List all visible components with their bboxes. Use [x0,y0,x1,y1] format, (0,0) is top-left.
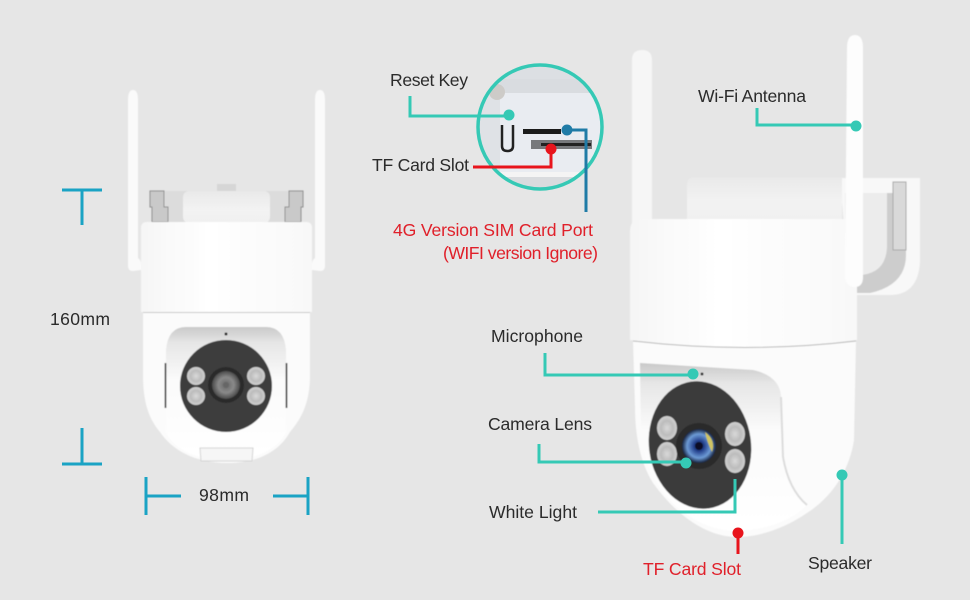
mounting bracket [150,184,303,223]
callout: SIM port: (WIFI version Ignore) [443,243,598,263]
lower body dome [633,341,856,537]
width dimension [146,477,308,515]
camera recess [166,327,286,460]
seam line [633,341,856,348]
lens panel [180,340,272,432]
LEDs [657,416,745,473]
side vents [166,363,286,408]
height dimension [62,190,102,464]
callout: microphone [491,326,698,380]
lower body dome [143,313,310,463]
callout: TF card slot bottom [643,528,744,579]
upper body [630,219,857,348]
callout: reset key [390,70,514,120]
front antenna [845,35,863,287]
callout: white light: White Light [489,502,577,522]
lens [208,367,244,403]
callout: TF card slot bottom: TF Card Slot [643,559,741,579]
microphone hole [700,372,704,376]
reset key U [502,125,513,151]
lens panel [641,375,759,515]
upper body [141,222,312,312]
back antenna [632,50,652,225]
callout: speaker: Speaker [808,553,872,573]
microphone hole [224,332,228,336]
TF slot [531,140,592,149]
callout: TF card slot inset: TF Card Slot [372,155,469,175]
callout: Wi-Fi antenna [698,86,862,132]
callout: white light [489,479,735,522]
callout: reset key: Reset Key [390,70,468,90]
SIM slot [523,129,561,134]
left antenna [128,90,141,271]
callout: TF card slot inset [372,144,556,175]
speaker panel highlight [781,397,807,505]
left camera front view [128,90,325,463]
right camera angled view [630,35,920,537]
base tab [200,448,253,461]
seam line [143,312,310,314]
inset detail circle [478,65,608,192]
callout: microphone: Microphone [491,326,583,346]
callout: camera lens: Camera Lens [488,414,592,434]
lens [676,423,722,469]
callout: speaker [808,470,872,573]
LEDs [187,367,265,405]
rotating knob [687,177,842,220]
wall bracket [840,178,920,295]
callout: SIM port: 4G Version SIM Card Port [393,220,593,240]
callout: camera lens [488,414,692,468]
callout: SIM port [393,124,598,263]
width label: 98mm [199,485,249,505]
camera recess [640,363,807,531]
height label: 160mm [50,309,110,329]
right antenna [312,90,325,271]
callout: Wi-Fi antenna: Wi-Fi Antenna [698,86,806,106]
